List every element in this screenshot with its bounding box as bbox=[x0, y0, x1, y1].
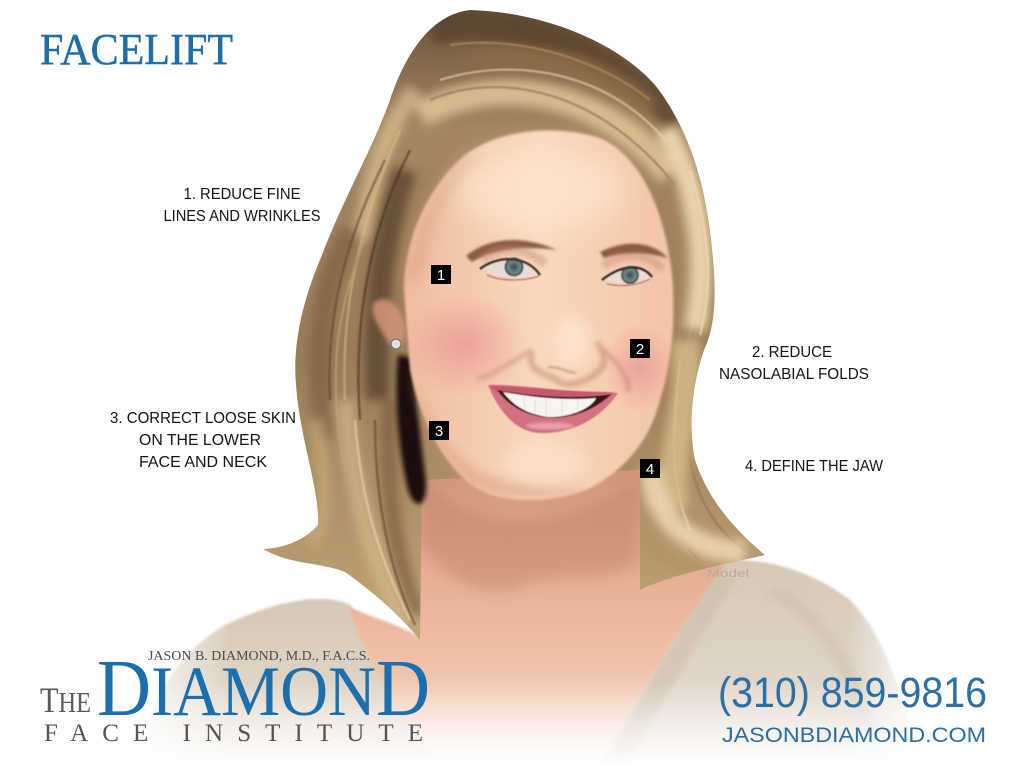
smile fold left bbox=[478, 350, 532, 378]
marker 3: 3 bbox=[435, 423, 443, 440]
logo DIAMOND: DIAMOND bbox=[97, 645, 430, 733]
website: JASONBDIAMOND.COM bbox=[722, 724, 986, 747]
smile fold right bbox=[604, 350, 628, 392]
right eyebrow bbox=[600, 244, 668, 258]
label 2 bbox=[719, 344, 869, 383]
label 3: ON THE LOWER bbox=[139, 432, 261, 449]
title: FACELIFT bbox=[40, 25, 233, 74]
sweater bbox=[135, 560, 920, 768]
logo THE: THE bbox=[40, 680, 91, 720]
crown strands bbox=[362, 25, 680, 240]
marker 1: 1 bbox=[437, 267, 445, 284]
right blond strands bbox=[640, 130, 745, 570]
label 3: FACE AND NECK bbox=[139, 454, 268, 471]
logo FACE INSTITUTE: FACE INSTITUTE bbox=[44, 720, 423, 747]
face bbox=[404, 131, 674, 500]
earring bbox=[391, 339, 401, 349]
right eye bbox=[602, 266, 652, 286]
left eyebrow bbox=[466, 240, 557, 262]
neck and chest bbox=[348, 440, 725, 768]
label 4: 4. DEFINE THE JAW bbox=[745, 458, 883, 475]
jaw shadow bbox=[410, 370, 590, 499]
marker 2: 2 bbox=[636, 341, 644, 358]
forehead highlight bbox=[455, 148, 625, 232]
nose bbox=[531, 316, 604, 384]
marker 1 bbox=[431, 265, 451, 284]
chin highlight bbox=[503, 444, 587, 480]
cheek blush right bbox=[604, 324, 676, 412]
logo bbox=[40, 645, 430, 747]
eye shadow bbox=[482, 250, 662, 270]
dark hair under ear bbox=[396, 355, 426, 504]
temple shadow bbox=[404, 155, 475, 290]
label 1: LINES AND WRINKLES bbox=[164, 208, 320, 225]
logo doctor name: JASON B. DIAMOND, M.D., F.A.C.S. bbox=[148, 648, 370, 663]
mouth bbox=[488, 385, 618, 433]
hair mass bbox=[250, 0, 780, 650]
label 2: NASOLABIAL FOLDS bbox=[719, 366, 869, 383]
label 2: 2. REDUCE bbox=[752, 344, 832, 361]
left strands bbox=[310, 170, 418, 625]
phone number: (310) 859-9816 bbox=[718, 669, 987, 717]
left eye bbox=[480, 258, 540, 280]
model caption: Model bbox=[707, 568, 749, 580]
ear bbox=[372, 299, 405, 347]
marker 4: 4 bbox=[646, 461, 654, 478]
label 3: 3. CORRECT LOOSE SKIN bbox=[110, 410, 296, 427]
marker 3 bbox=[429, 421, 449, 440]
label 3 bbox=[110, 410, 296, 471]
label 1: 1. REDUCE FINE bbox=[184, 186, 300, 203]
label 1 bbox=[164, 186, 320, 225]
bottom and side fade bbox=[0, 600, 1024, 768]
cheek blush left bbox=[403, 293, 527, 397]
model portrait bbox=[152, 10, 906, 756]
neck shadow bbox=[420, 470, 640, 591]
marker 4 bbox=[640, 459, 660, 478]
marker 2 bbox=[630, 339, 650, 358]
fine hair strands bbox=[329, 43, 745, 625]
